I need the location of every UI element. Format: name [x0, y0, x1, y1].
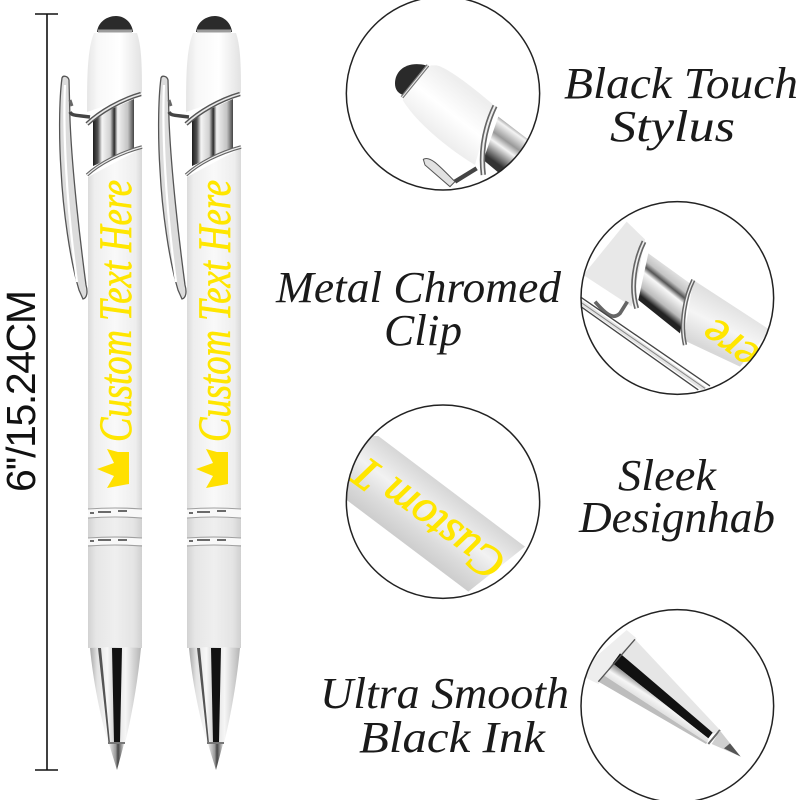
panel: stylus detail circle	[346, 0, 540, 190]
panel: clip detail circle	[580, 202, 774, 394]
pen: left: Custom Text Here	[90, 180, 142, 442]
label: metal chromed clip: Clip	[384, 306, 462, 355]
label: metal chromed clip: Metal Chromed	[275, 263, 562, 312]
label: black touch stylus: Stylus	[610, 102, 735, 151]
label: sleek designhab: Designhab	[578, 493, 775, 542]
pen: left	[60, 16, 142, 770]
panel: clip detail circle: ere	[691, 308, 768, 383]
label: black touch stylus: Black Touch	[564, 59, 798, 108]
label: ultra smooth black ink: Ultra Smooth	[320, 669, 569, 718]
label: metal chromed clip	[275, 263, 562, 355]
label: ultra smooth black ink: Black Ink	[359, 713, 547, 762]
dimension line	[35, 14, 58, 770]
panel: sleek body detail circle: Custom T	[338, 444, 514, 591]
pen: right: Custom Text Here	[189, 180, 241, 442]
panel: sleek body detail circle	[338, 405, 540, 598]
label: sleek designhab: Sleek	[618, 451, 718, 500]
label: ultra smooth black ink	[320, 669, 569, 762]
pen: right	[159, 16, 241, 770]
panel: tip detail circle	[577, 610, 774, 800]
label: black touch stylus	[564, 59, 798, 151]
label: sleek designhab	[578, 451, 775, 542]
